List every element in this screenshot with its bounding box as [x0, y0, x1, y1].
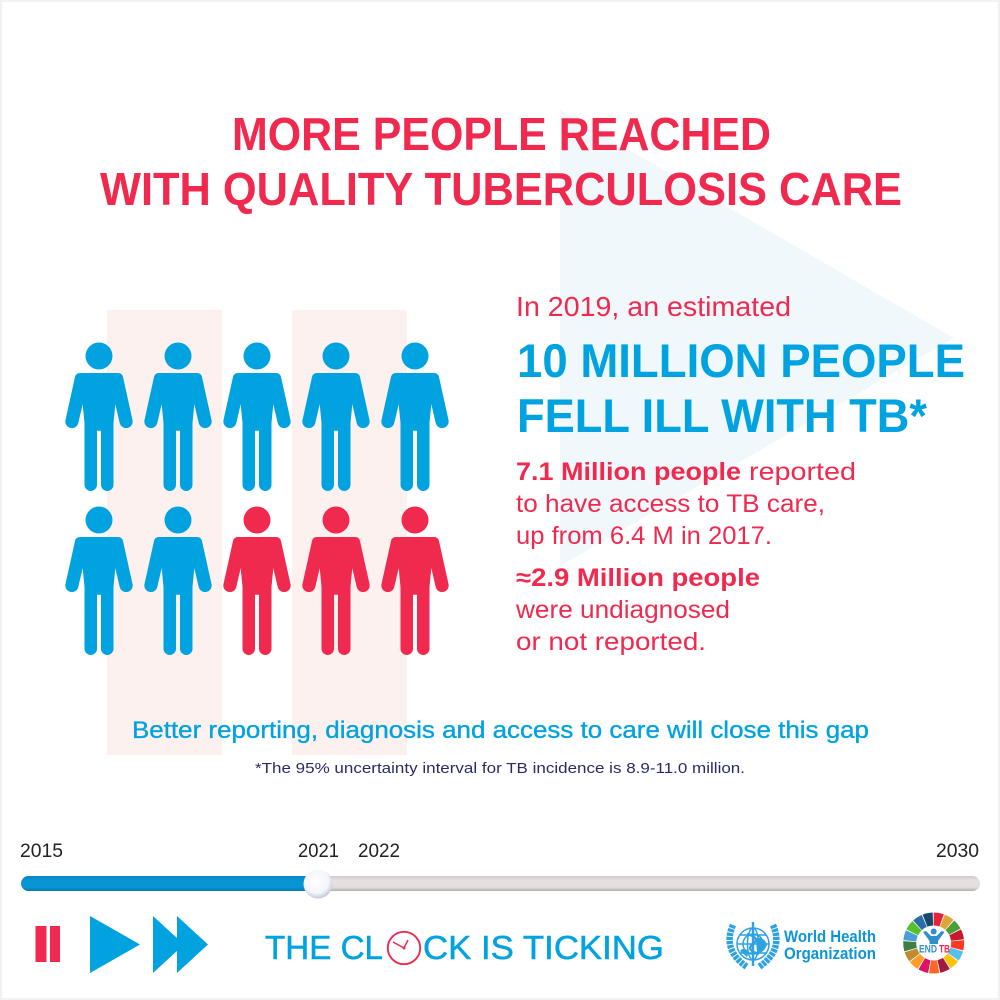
slider track	[21, 876, 980, 891]
icon: three people undiagnosed	[223, 506, 449, 655]
text: people with access to care: reported	[749, 458, 856, 486]
year labels: 2015	[20, 841, 63, 862]
headline statistic: FELL ILL WITH TB*	[517, 389, 928, 442]
logo: World Health Organization	[730, 922, 876, 967]
intro text: In 2019, an estimated	[516, 291, 791, 322]
year labels: 2021	[298, 841, 339, 862]
timeline	[20, 841, 980, 898]
icon: fast forward	[153, 916, 208, 973]
slider knob	[304, 870, 332, 898]
title: MORE PEOPLE REACHED	[232, 108, 771, 160]
call to action: Better reporting, diagnosis and access to care will close this gap	[132, 717, 869, 744]
icon: person with raised arms	[923, 928, 944, 944]
slogan: the clock is ticking: THE CL	[265, 929, 383, 966]
headline statistic	[517, 334, 965, 442]
text: people with access to care	[516, 458, 856, 550]
text: people undiagnosed: were undiagnosed	[515, 596, 730, 624]
pink band right	[292, 310, 407, 755]
logo: End TB	[900, 909, 968, 977]
icon: play	[90, 916, 140, 973]
icon: seven people with access to care	[65, 342, 449, 655]
text: people with access to care: to have access to TB care,	[516, 490, 825, 518]
end tb wordmark: END	[919, 944, 937, 956]
wordmark	[784, 928, 876, 963]
title	[100, 108, 902, 215]
text: people with access to care: 7.1 Million people	[516, 458, 741, 486]
text: people undiagnosed: or not reported.	[516, 628, 706, 656]
pictogram: ten people	[65, 342, 449, 655]
text: people undiagnosed: ≈2.9 Million people	[516, 564, 760, 592]
slogan: the clock is ticking	[265, 929, 664, 966]
pink band left	[107, 310, 222, 755]
slider progress	[21, 876, 319, 891]
tb wordmark: TB	[939, 944, 950, 956]
year labels: 2022	[358, 841, 400, 862]
wordmark: World Health	[784, 928, 876, 946]
slogan: the clock is ticking: CK IS TICKING	[423, 929, 664, 966]
colour ring	[900, 909, 968, 977]
footnote: *The 95% uncertainty interval for TB incidence is 8.9-11.0 million.	[255, 760, 745, 777]
icon: pause	[36, 926, 60, 962]
wordmark: Organization	[784, 945, 876, 963]
icon: clock	[388, 932, 420, 964]
text: people with access to care: up from 6.4 M in 2017.	[516, 522, 772, 550]
background play triangle	[560, 110, 954, 566]
year labels	[20, 841, 979, 862]
icon: WHO emblem	[730, 922, 776, 967]
headline statistic: 10 MILLION PEOPLE	[517, 334, 965, 387]
title: WITH QUALITY TUBERCULOSIS CARE	[100, 163, 902, 215]
year labels: 2030	[936, 841, 979, 862]
text: people undiagnosed	[515, 564, 760, 656]
